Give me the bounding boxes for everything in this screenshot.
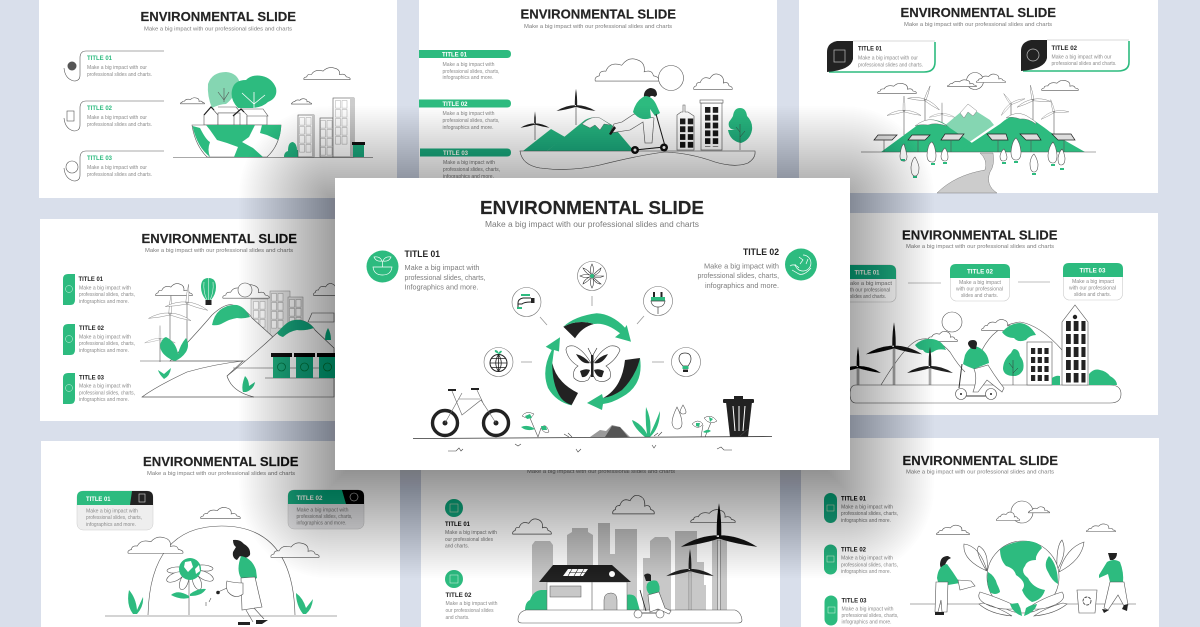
card 03: with our professional [1069, 286, 1116, 292]
list item 01 [419, 50, 511, 81]
list item 01: professional slides and charts. [87, 72, 152, 78]
title 02 block [698, 247, 817, 290]
subtitle: Make a big impact with our professional slides and charts [485, 220, 699, 229]
list item 02: TITLE 02 [79, 325, 104, 332]
card 03: Make a big impact [1072, 279, 1115, 285]
list item 03: TITLE 03 [87, 155, 112, 162]
card 01: th our professional [850, 288, 890, 294]
flowers left [521, 412, 549, 437]
panel: slide bottom left [41, 441, 400, 627]
card 02: TITLE 02 [967, 268, 993, 276]
list item 02: Make a big impact with [79, 334, 131, 340]
card 01: slides and charts. [850, 294, 886, 300]
panel: slide bottom center [421, 460, 780, 627]
list item 01: professional slides, charts, [841, 511, 898, 517]
ground line [413, 436, 772, 438]
list item 02: professional slides, charts, [442, 118, 500, 124]
grass marks [448, 429, 748, 452]
list item 01: Make a big impact with [79, 286, 131, 292]
hill one [170, 305, 280, 361]
list item 01 [63, 274, 135, 305]
list item 01: infographics and more. [442, 75, 494, 81]
illustration: houses on half globe with city [173, 68, 373, 158]
list item 02: TITLE 02 [446, 592, 472, 599]
list item 03: professional slides, charts, [443, 167, 500, 173]
list item 01: professional slides, charts, [442, 69, 500, 75]
list item 03: Make a big impact with [79, 384, 131, 390]
heading: ENVIRONMENTAL SLIDE [520, 8, 676, 22]
heading: ENVIRONMENTAL SLIDE [140, 10, 296, 24]
list item 03: Make a big impact with our [87, 165, 147, 171]
illustration: scooter rider with turbines and buildings [835, 305, 1121, 403]
list item 03 [64, 151, 164, 181]
card 02: TITLE 02 [296, 495, 323, 502]
card 01: TITLE 01 [86, 496, 111, 503]
list item 02: and charts. [446, 615, 470, 621]
hill two and right lobe [227, 320, 334, 397]
panel: slide middle right [830, 213, 1158, 415]
panel: slide top right [799, 0, 1158, 193]
card 01 [827, 41, 935, 72]
list item 01: TITLE 01 [87, 55, 112, 62]
trash bin [723, 396, 754, 437]
list item 01 [824, 493, 898, 524]
title 02 block: TITLE 02 [743, 247, 779, 257]
list item 01: TITLE 01 [445, 521, 470, 528]
list item 02: TITLE 02 [442, 101, 468, 108]
subtitle: Make a big impact with our professional slides and charts [144, 26, 292, 32]
list item 01: infographics and more. [79, 299, 129, 305]
list item 01: TITLE 01 [78, 276, 103, 283]
list item 02: professional slides, charts, [79, 341, 135, 347]
card 02: Make a big impact with our [1052, 54, 1112, 60]
card 02 [288, 490, 364, 529]
title 01 block: professional slides, charts, [404, 273, 486, 282]
list item 02 [824, 544, 898, 575]
icon: plug [644, 286, 672, 316]
connector [908, 282, 1050, 283]
subtitle: Make a big impact with our professional slides and charts [524, 24, 672, 30]
list item 03 [824, 596, 898, 626]
subtitle: Make a big impact with our professional slides and charts [145, 248, 293, 254]
subtitle: Make a big impact with our professional slides and charts [904, 22, 1052, 28]
panel: slide top left [39, 0, 397, 198]
list item 03: infographics and more. [443, 174, 494, 180]
card 02: Make a big impact [959, 280, 1002, 286]
card 01: TITLE 01 [858, 46, 882, 52]
card 01: TITLE 01 [854, 270, 880, 276]
panel: slide middle left [40, 219, 342, 421]
list item 03 [420, 148, 511, 180]
list item 02: professional slides, charts, [841, 562, 898, 568]
heading: ENVIRONMENTAL SLIDE [480, 197, 704, 218]
rocks [590, 425, 630, 437]
heading: ENVIRONMENTAL SLIDE [143, 455, 298, 469]
list item 02: professional slides and charts. [87, 122, 152, 128]
icon: water tap [512, 288, 541, 316]
heading: ENVIRONMENTAL SLIDE [902, 228, 1058, 242]
list item 03: Make a big impact with [842, 606, 894, 612]
list item 01 [64, 51, 164, 81]
list item 02: Make a big impact with [446, 601, 498, 607]
connector ticks [521, 296, 664, 362]
title 02 block: infographics and more. [705, 281, 779, 290]
list item 03: infographics and more. [842, 620, 892, 626]
list item 03: infographics and more. [79, 397, 129, 403]
list item 02 [64, 101, 164, 131]
water drops [672, 405, 686, 429]
title 01 block: Make a big impact with [404, 263, 480, 272]
panel: slide top center [419, 0, 777, 180]
list item 01: and charts. [445, 544, 469, 550]
list item 03: professional slides and charts. [87, 172, 152, 178]
list item 03: professional slides, charts, [79, 390, 135, 396]
title 02 block: professional slides, charts, [698, 271, 779, 280]
green plant [632, 407, 660, 437]
icon: globe [484, 348, 513, 376]
list item 02: TITLE 02 [841, 546, 866, 554]
heading: ENVIRONMENTAL SLIDE [900, 6, 1056, 20]
illustration: woman watering globe flower [105, 507, 337, 625]
list item 02 [445, 570, 498, 621]
illustration: hills with turbines, balloon, city and recycling bins [140, 278, 342, 397]
card 02: TITLE 02 [1052, 45, 1077, 52]
icon: plant in bowl [373, 257, 392, 275]
card 02: slides and charts. [961, 293, 998, 299]
center slide drop shadow [239, 106, 934, 578]
card 01: professional slides and charts. [858, 62, 923, 68]
list item 01: TITLE 01 [841, 496, 866, 502]
card 02: professional slides and charts. [1052, 61, 1116, 67]
list item 03 [63, 373, 135, 404]
list item 02: TITLE 02 [87, 105, 112, 112]
list item 01: our professional slides [445, 537, 493, 543]
card 01: Make a big impact with our [858, 56, 918, 62]
card 01: professional slides, charts, [86, 515, 142, 521]
card 02: infographics and more. [296, 520, 346, 526]
card 01: infographics and more. [86, 522, 136, 528]
heading: ENVIRONMENTAL SLIDE [142, 232, 297, 246]
list item 01: Make a big impact with [841, 504, 893, 510]
icon: light bulb [672, 348, 700, 376]
list item 03: TITLE 03 [443, 150, 468, 157]
icon: globe in hand [790, 255, 811, 274]
illustration: scooter rider with mountains and city [520, 59, 755, 169]
list item 02 [63, 324, 135, 355]
card 01 [830, 265, 896, 302]
card 02: professional slides, charts, [296, 514, 352, 520]
list item 02: Make a big impact with our [87, 115, 147, 121]
list item 01: Make a big impact with [442, 62, 495, 68]
list item 03: professional slides, charts, [842, 613, 898, 619]
subtitle: Make a big impact with our professional slides and charts [147, 471, 295, 477]
panel: center slide [335, 178, 850, 470]
list item 01: professional slides, charts, [79, 292, 135, 298]
heading: ENVIRONMENTAL SLIDE [902, 454, 1058, 468]
list item 02: infographics and more. [442, 125, 494, 131]
list item 03: TITLE 03 [842, 598, 867, 604]
list item 01: TITLE 01 [442, 52, 467, 58]
title 01 block [366, 249, 486, 292]
illustration: people caring for the planet [910, 501, 1136, 616]
card 01 [77, 491, 153, 530]
card 03: TITLE 03 [1080, 268, 1106, 274]
icon: butterfly [566, 346, 620, 382]
flowers right [692, 416, 717, 437]
card 02 [1021, 40, 1129, 71]
list item 01 [445, 499, 497, 550]
list item 01: infographics and more. [841, 518, 891, 524]
list item 02 [419, 100, 511, 131]
list item 03: TITLE 03 [79, 374, 104, 382]
list item 03: Make a big impact with [443, 160, 495, 166]
panel: slide bottom right [801, 438, 1159, 627]
list item 02: Make a big impact with [442, 111, 495, 117]
card 03 [1063, 263, 1123, 300]
card 01: ake a big impact [850, 281, 893, 287]
list item 01: Make a big impact with our [87, 65, 147, 71]
illustration: mountains with wind turbines and solar panels [861, 72, 1096, 193]
recycling arrows [545, 313, 641, 410]
subtitle: Make a big impact with our professional slides and charts [527, 469, 675, 475]
subtitle: Make a big impact with our professional slides and charts [906, 244, 1054, 250]
list item 02: Make a big impact with [841, 556, 893, 562]
list item 02: infographics and more. [841, 569, 891, 575]
icon: flower [578, 262, 606, 290]
bicycle [432, 388, 508, 436]
card 02: Make a big impact with [296, 508, 349, 514]
card 02: with our professional [956, 286, 1003, 292]
title 01 block: Infographics and more. [404, 282, 478, 292]
title 02 block: Make a big impact with [704, 262, 779, 270]
illustration: house, skyline, turbines and scooter rider [513, 495, 757, 623]
hill lower left [142, 361, 254, 397]
title 01 block: TITLE 01 [404, 249, 440, 259]
list item 02: infographics and more. [79, 348, 129, 354]
card 02 [950, 264, 1010, 301]
card 01: Make a big impact with [86, 508, 138, 514]
subtitle: Make a big impact with our professional slides and charts [906, 470, 1054, 476]
card 03: slides and charts. [1074, 292, 1111, 298]
list item 01: Make a big impact with [445, 530, 497, 536]
list item 02: our professional slides [446, 608, 494, 614]
